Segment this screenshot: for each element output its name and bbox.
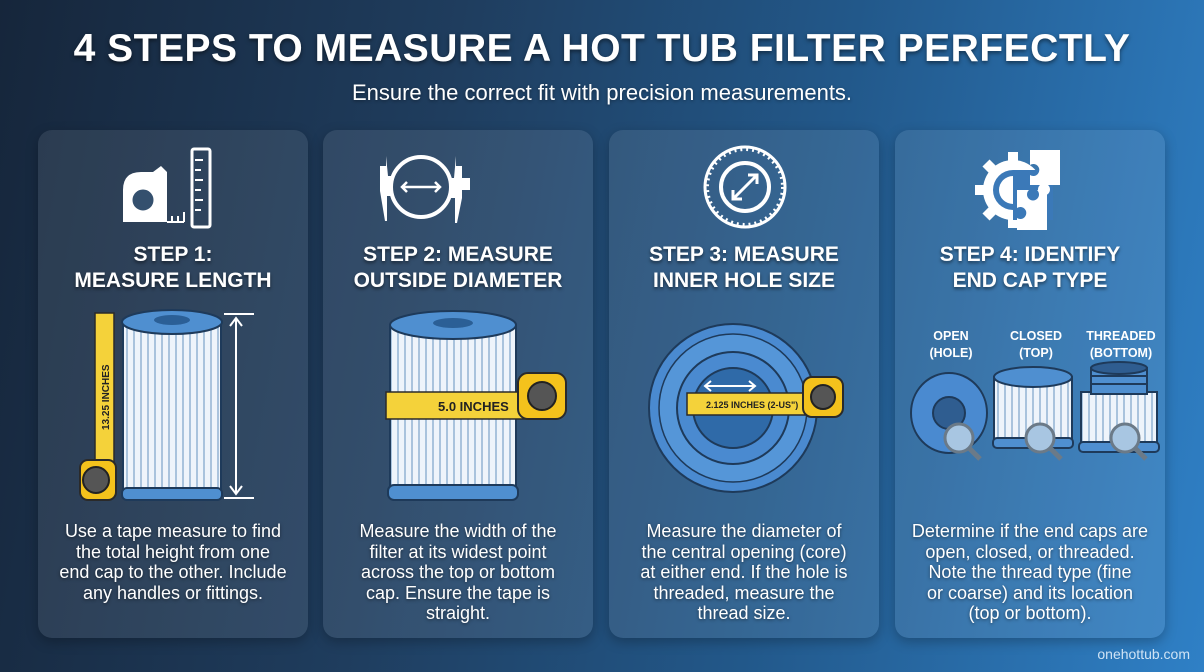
panel: step 3 <box>609 130 879 638</box>
arrow: inner diameter <box>705 381 755 391</box>
body text <box>359 521 557 626</box>
heading <box>74 243 272 292</box>
heading: STEP 4: IDENTIFY <box>940 243 1120 266</box>
filter <box>122 310 222 500</box>
labels: cap types: OPEN <box>933 329 969 343</box>
labels: cap types: THREADED <box>1086 329 1156 343</box>
heading: OUTSIDE DIAMETER <box>354 269 562 292</box>
heading: MEASURE LENGTH <box>74 269 272 292</box>
icon: gear and puzzle <box>975 150 1060 230</box>
panel: step 4 <box>895 130 1165 638</box>
body text: straight. <box>426 603 490 623</box>
tape: 5.0 inches: 5.0 INCHES <box>438 399 509 414</box>
footer credit: onehottub.com <box>1097 646 1190 662</box>
title: 4 STEPS TO MEASURE A HOT TUB FILTER PERFECTLY <box>74 27 1130 70</box>
icon: tape measure and ruler <box>123 149 210 227</box>
tape: 2.125 inches: 2.125 INCHES (2-US") <box>706 400 798 410</box>
body text: Measure the diameter of <box>646 521 842 541</box>
body text: at either end. If the hole is <box>640 562 848 582</box>
panel: step 2 <box>323 130 593 638</box>
body text <box>912 521 1149 625</box>
body text: Note the thread type (fine <box>928 562 1132 582</box>
labels: cap types <box>929 329 1156 360</box>
tape: 13.25 inches: 13.25 INCHES <box>101 364 112 430</box>
threaded cap filter <box>1079 362 1159 452</box>
subtitle: Ensure the correct fit with precision measurements. <box>352 80 852 105</box>
body text: Determine if the end caps are <box>912 521 1148 541</box>
body text: Measure the width of the <box>359 521 557 541</box>
body text: or coarse) and its location <box>927 582 1133 602</box>
body text: Use a tape measure to find <box>65 521 281 541</box>
heading: END CAP TYPE <box>953 269 1107 292</box>
labels: cap types: (HOLE) <box>929 346 973 360</box>
panel: step 1 <box>38 130 308 638</box>
heading: STEP 2: MEASURE <box>363 243 553 266</box>
heading <box>353 243 563 292</box>
body text: the total height from one <box>76 542 270 562</box>
arrow: height <box>224 314 254 498</box>
body text: the central opening (core) <box>641 542 847 562</box>
icon: dial with diagonal arrow <box>705 147 785 227</box>
body text: (top or bottom). <box>968 603 1092 623</box>
heading <box>649 243 840 292</box>
filter <box>388 311 518 500</box>
body text: across the top or bottom <box>361 562 555 582</box>
body text <box>59 521 287 605</box>
body text <box>640 521 848 623</box>
labels: cap types: (TOP) <box>1019 346 1053 360</box>
body text: thread size. <box>697 603 791 623</box>
body text: cap. Ensure the tape is <box>366 582 550 602</box>
open cap <box>911 373 987 453</box>
body text: filter at its widest point <box>369 542 547 562</box>
filter end cap <box>649 324 817 492</box>
heading: STEP 3: MEASURE <box>649 243 839 266</box>
body text: open, closed, or threaded. <box>925 542 1135 562</box>
heading: INNER HOLE SIZE <box>653 269 835 292</box>
icon: calipers and diameter <box>380 156 470 223</box>
labels: cap types: CLOSED <box>1010 329 1062 343</box>
heading: STEP 1: <box>134 243 212 266</box>
tape: 2.125 inches <box>687 377 843 417</box>
heading <box>939 243 1121 292</box>
body text: any handles or fittings. <box>83 582 263 602</box>
tape: 13.25 inches <box>80 313 116 500</box>
body text: end cap to the other. Include <box>59 562 287 582</box>
icons: magnifiers <box>945 424 1146 459</box>
labels: cap types: (BOTTOM) <box>1090 346 1152 360</box>
tape: 5.0 inches <box>386 373 566 419</box>
closed cap filter <box>993 367 1073 448</box>
body text: threaded, measure the <box>653 582 835 602</box>
